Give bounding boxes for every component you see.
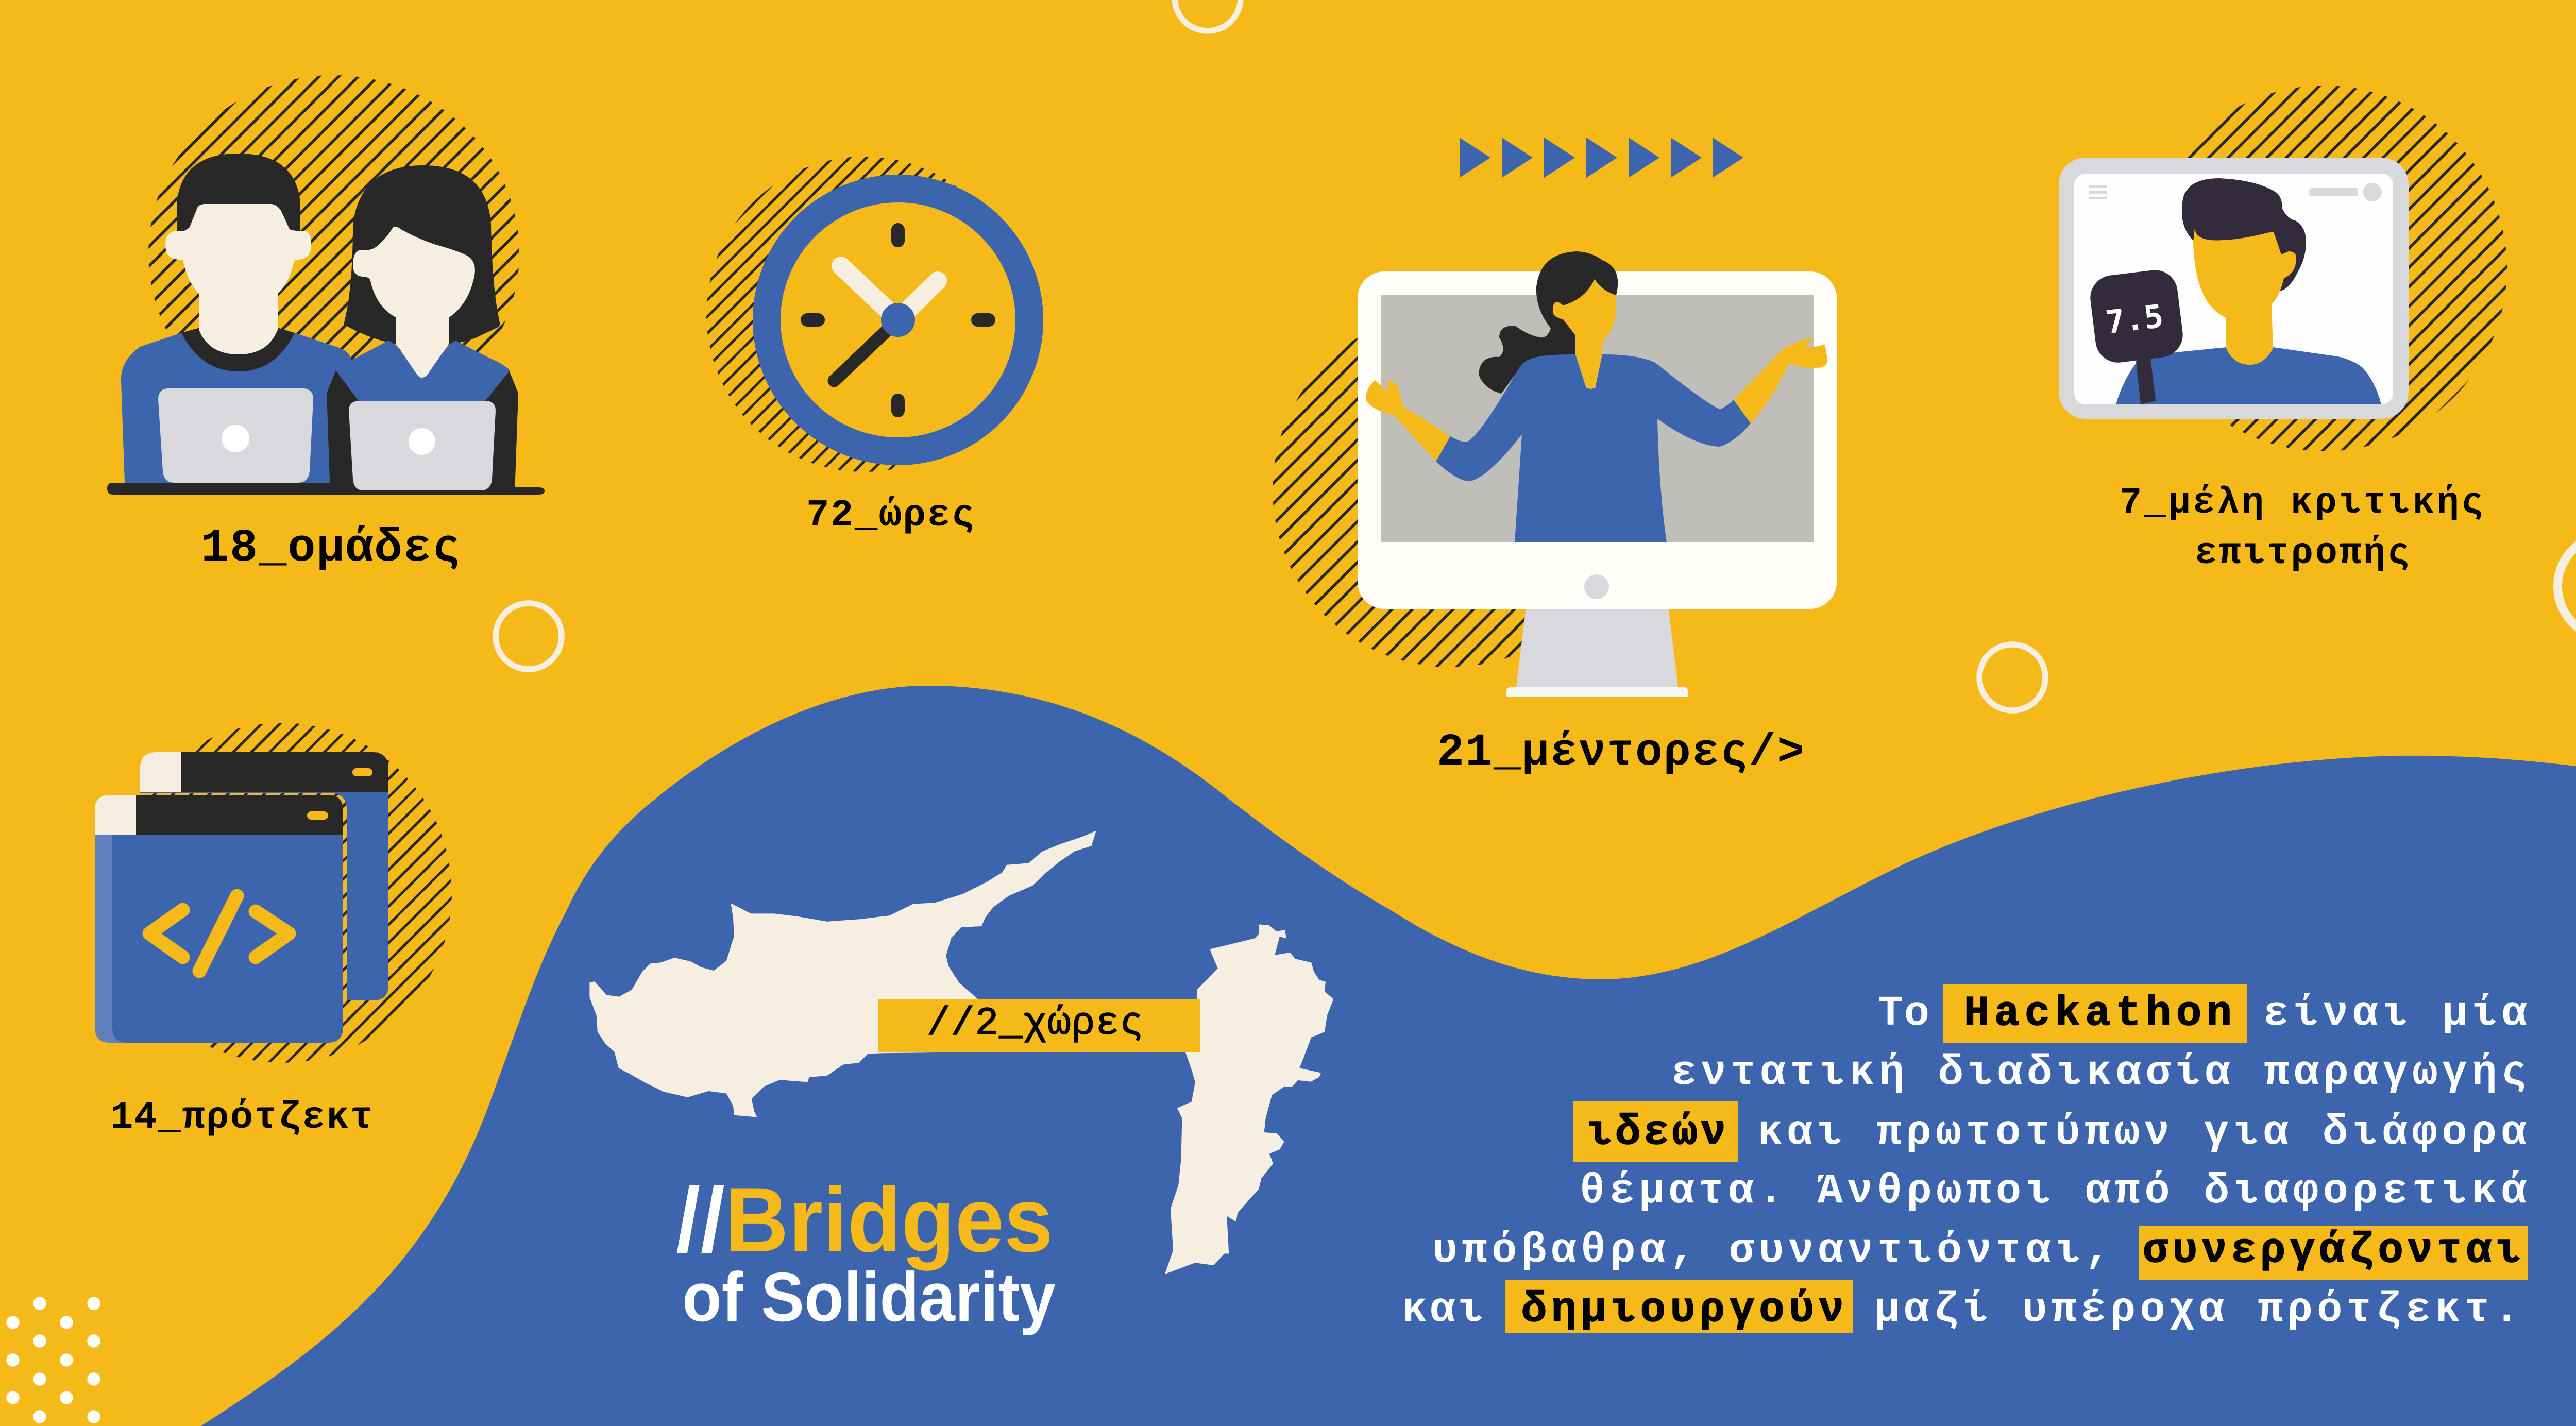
woman hair xyxy=(1479,251,1618,394)
map: second island xyxy=(1166,925,1333,1273)
front window tab xyxy=(95,795,136,835)
woman laptop logo xyxy=(409,428,435,455)
line 6: και xyxy=(1402,1286,1483,1334)
monitor button xyxy=(1584,574,1609,599)
score paddle handle xyxy=(2136,358,2156,404)
label: 2 countries: //2_χώρες xyxy=(927,1001,1143,1046)
title: Bridges of Solidarity xyxy=(676,1168,1056,1336)
man laptop xyxy=(158,388,313,483)
icon: clock xyxy=(767,189,1029,451)
front window light strip xyxy=(95,835,128,1043)
monitor body xyxy=(1358,271,1837,609)
juror hair xyxy=(2182,178,2306,291)
desk line xyxy=(107,483,545,495)
line 1: Hackathon xyxy=(1964,990,2232,1038)
label: 18 teams: 18_ομάδες xyxy=(201,522,460,575)
front window body xyxy=(95,835,343,1043)
frame xyxy=(2059,158,2409,419)
clock hub xyxy=(881,303,915,337)
monitor stand xyxy=(1516,603,1679,690)
man shirt xyxy=(121,333,351,483)
back window tab xyxy=(140,752,181,792)
line 6 xyxy=(1402,1286,2519,1334)
front window header xyxy=(136,795,343,835)
woman hair xyxy=(344,165,500,346)
monitor base xyxy=(1506,687,1688,697)
woman top xyxy=(336,341,510,401)
man collar xyxy=(181,328,295,371)
woman face xyxy=(1553,279,1616,389)
panel: teams xyxy=(107,75,545,575)
dot grid xyxy=(6,1297,100,1423)
icon: man and woman with laptops xyxy=(107,154,545,495)
decorative rings xyxy=(496,0,2576,710)
score text: 7.5 xyxy=(2104,297,2165,342)
frame inner xyxy=(2074,174,2393,404)
hatch circle: jury xyxy=(2141,86,2507,451)
line 6: μαζί υπέροχα πρότζεκτ. xyxy=(1874,1286,2519,1334)
text block: hackathon description xyxy=(1402,984,2528,1334)
code symbol xyxy=(149,896,289,971)
label: 2 countries xyxy=(878,999,1200,1052)
label: 7 jury members: 7_μέλη κριτικής xyxy=(2120,482,2483,524)
label: 14 projects: 14_πρότζεκτ xyxy=(110,1096,373,1140)
line 6: δημιουργούν xyxy=(1521,1286,1844,1334)
line 1: είναι μία xyxy=(2263,990,2528,1038)
woman laptop xyxy=(349,401,496,490)
panel: hours xyxy=(706,157,1029,537)
hatch circle: teams xyxy=(148,75,519,432)
menu icon xyxy=(2089,185,2107,199)
panel: mentors xyxy=(1273,138,1837,778)
label: 21 mentors: 21_μέντορες/> xyxy=(1437,727,1804,778)
title: Bridges of Solidarity: //Bridges xyxy=(676,1168,1053,1271)
line 5: συνεργάζονται xyxy=(2143,1227,2521,1275)
highlight boxes xyxy=(1505,984,2528,1333)
juror face xyxy=(2193,228,2296,365)
line 3: ιδεών xyxy=(1587,1109,1726,1157)
woman left arm xyxy=(1366,380,1450,462)
clock face and ring xyxy=(767,189,1029,451)
line 1: Το xyxy=(1878,990,1929,1038)
icon: monitor with woman xyxy=(1358,251,1837,697)
hatch circle: mentors xyxy=(1273,312,1628,667)
juror torso xyxy=(2116,347,2381,404)
blue wave shape xyxy=(201,686,2576,1426)
line 3: και πρωτοτύπων για διάφορα xyxy=(1757,1109,2527,1157)
arrows row xyxy=(1460,138,1743,178)
woman right arm xyxy=(1734,337,1827,423)
label: 7 jury members xyxy=(2120,482,2483,574)
score paddle xyxy=(2088,267,2185,365)
woman sleeves xyxy=(327,370,518,495)
title: Bridges of Solidarity: of Solidarity xyxy=(682,1258,1056,1336)
panel: maps xyxy=(590,832,1333,1273)
hatch circle: clock xyxy=(706,157,1022,472)
front window pill xyxy=(307,811,328,820)
back window body xyxy=(140,792,388,1000)
clock hands xyxy=(834,266,938,381)
woman top xyxy=(1436,354,1751,542)
line 2: εντατική διαδικασία παραγωγής xyxy=(1671,1049,2527,1097)
man laptop logo xyxy=(222,425,249,452)
back window header xyxy=(181,752,388,792)
line 1 xyxy=(1878,990,2528,1038)
icon: video frame with juror xyxy=(2059,158,2409,419)
clock ticks xyxy=(807,230,989,411)
monitor screen xyxy=(1381,295,1814,542)
back window pill xyxy=(352,768,372,776)
map: Cyprus xyxy=(590,832,1095,1116)
icon: code windows xyxy=(95,752,388,1043)
label: 72 hours: 72_ώρες xyxy=(806,494,974,537)
panel: projects xyxy=(95,723,452,1140)
panel: jury xyxy=(2059,86,2507,574)
man face xyxy=(165,204,311,354)
label: 7 jury members: επιτροπής xyxy=(2195,532,2410,574)
line 5 xyxy=(1432,1227,2521,1275)
avatar dot xyxy=(2363,183,2382,201)
man hair xyxy=(177,154,300,232)
woman face xyxy=(353,227,475,378)
search pill xyxy=(2309,188,2358,196)
line 5: υπόβαθρα, συναντιόνται, xyxy=(1432,1227,2110,1275)
hatch circle: projects xyxy=(112,723,452,1063)
line 4: θέματα. Άνθρωποι από διαφορετικά xyxy=(1580,1167,2527,1215)
